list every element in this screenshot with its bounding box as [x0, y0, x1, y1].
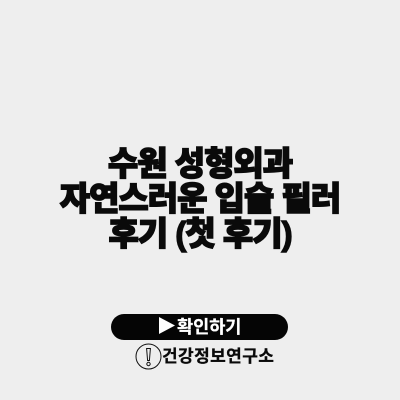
- button: confirm: [111, 314, 288, 340]
- button label: 확인하기: [177, 317, 241, 337]
- icon: play triangle: [159, 317, 175, 334]
- title: 수원 성형외과: [108, 145, 292, 182]
- title: [59, 145, 340, 253]
- icon: exclamation circle: [136, 344, 162, 370]
- title: 자연스러운 입술 필러: [60, 180, 340, 217]
- title: 후기 (첫 후기): [108, 215, 292, 252]
- brand name: 건강정보연구소: [162, 347, 274, 366]
